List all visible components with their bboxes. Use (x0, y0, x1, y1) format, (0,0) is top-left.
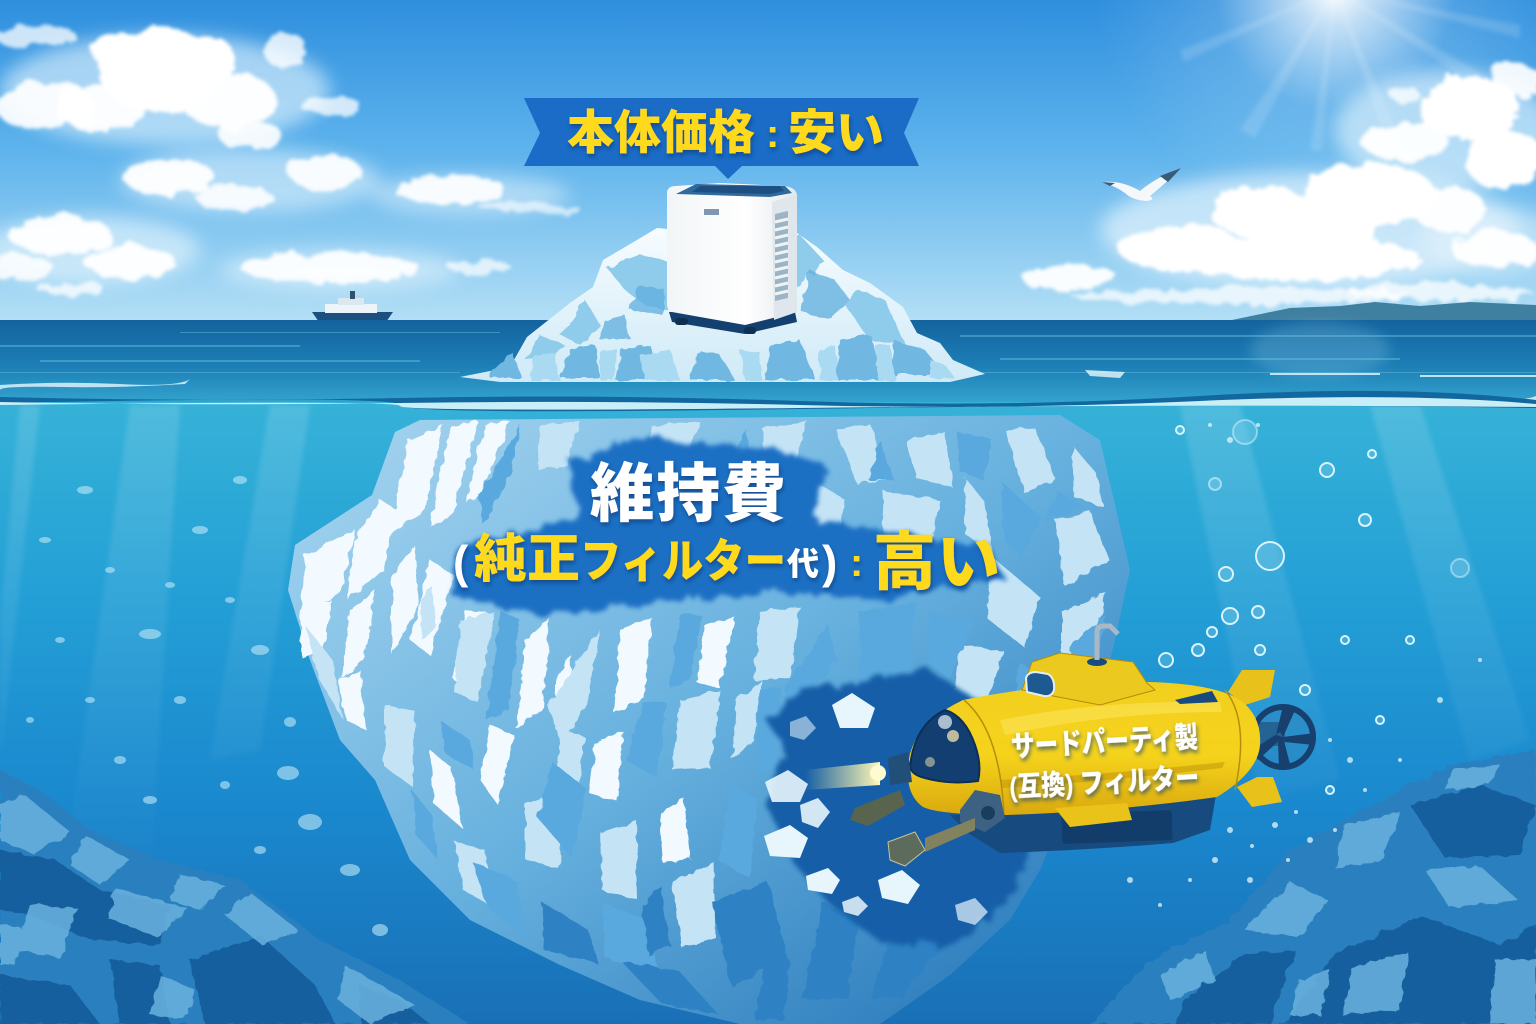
dark lower facets (542, 712, 1072, 1020)
heading: genuine filter cost high: フィルター (580, 535, 786, 587)
heading: genuine filter cost high: 純正 (474, 531, 580, 589)
sky background (0, 0, 1536, 325)
heading: maintenance cost: 維持費 (590, 458, 786, 530)
main hull (908, 682, 1260, 815)
periscope (1087, 626, 1118, 666)
banner text (567, 106, 884, 160)
heading: genuine filter cost high: 代 (787, 546, 819, 582)
tail fins (1228, 670, 1282, 807)
clouds: right (1022, 62, 1536, 304)
submarine (805, 626, 1315, 866)
foam specks right of submarine (1127, 423, 1482, 907)
heading: genuine filter cost high (453, 528, 1000, 598)
water surface line (0, 391, 1536, 411)
seabed rocks right (1090, 750, 1536, 1024)
banner text: : (766, 112, 779, 156)
distant island (1232, 302, 1536, 322)
pale facets (305, 421, 1109, 948)
underwater background (0, 402, 1536, 1024)
light beam (805, 762, 880, 790)
main submerged iceberg (288, 415, 1130, 1024)
seabed rocks left (0, 770, 470, 1024)
white facets (300, 421, 735, 864)
submarine label (1006, 721, 1201, 803)
hatch (1175, 691, 1218, 704)
cockpit window (910, 710, 979, 782)
mid blue facets (412, 424, 1106, 972)
banner text: 本体価格 (567, 106, 755, 159)
propeller (1252, 706, 1315, 770)
iceberg tip above water (460, 228, 985, 382)
lower navy hull (950, 795, 1216, 853)
humidifier product (667, 183, 797, 334)
dark blue patch behind heading (452, 438, 1005, 615)
clouds: upper left (0, 26, 580, 294)
banner: body price (524, 98, 919, 179)
floating particles and bubbles left (26, 476, 388, 936)
banner text: 安い (788, 107, 884, 160)
yellow skid (1055, 803, 1132, 827)
heading: genuine filter cost high: : (850, 541, 863, 585)
underwater light rays (0, 405, 1530, 900)
seagull (1102, 168, 1181, 201)
bubbles right (1159, 420, 1469, 794)
ice chunks near cavity (764, 693, 988, 925)
sun and rays (1095, 0, 1536, 230)
headlamp (870, 752, 912, 785)
heading: genuine filter cost high: ) (822, 536, 837, 588)
conning tower (1022, 653, 1155, 705)
cloud haze (0, 35, 1536, 290)
ship on horizon (312, 291, 393, 322)
heading: genuine filter cost high: ( (453, 536, 469, 588)
submarine label: (互換) フィルター (1008, 762, 1200, 803)
robot arms (850, 790, 1005, 866)
submarine label: サードパーティ製 (1010, 721, 1199, 764)
sea surface (0, 320, 1536, 405)
heading: genuine filter cost high: 高い (873, 528, 1000, 598)
cavity drilled by submarine (765, 670, 1040, 945)
